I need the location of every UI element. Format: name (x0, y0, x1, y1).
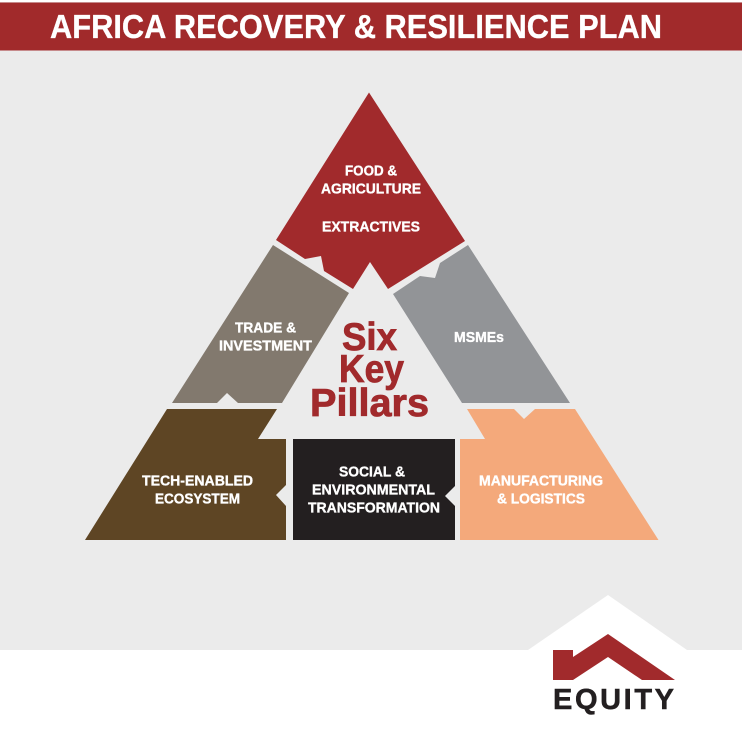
panel: social and environmental transformation: SOCIAL & (339, 464, 405, 480)
panel: food and agriculture, extractives: EXTRACTIVES (322, 220, 420, 236)
panel: trade and investment: TRADE & (235, 320, 296, 336)
panel: food and agriculture, extractives: FOOD & (345, 164, 397, 180)
panel: tech-enabled ecosystem: ECOSYSTEM (155, 492, 240, 508)
panel: tech-enabled ecosystem (85, 409, 286, 540)
pyramid diagram (85, 92, 658, 540)
logo: equity (528, 595, 687, 716)
icon: roof (553, 634, 675, 680)
logo: equity: EQUITY (553, 684, 674, 716)
panel: food and agriculture, extractives (276, 92, 465, 289)
panel: MSMEs: MSMEs (454, 330, 504, 346)
panel: manufacturing and logistics: MANUFACTURING (479, 474, 603, 490)
title banner (0, 2, 742, 50)
panel: tech-enabled ecosystem: TECH-ENABLED (142, 474, 253, 490)
panel: trade and investment (172, 245, 349, 403)
panel: MSMEs (393, 245, 570, 403)
panel: social and environmental transformation: ENVIRONMENTAL (312, 482, 435, 498)
panel: social and environmental transformation: TRANSFORMATION (308, 500, 440, 516)
center heading: six key pillars: Six (342, 316, 397, 359)
center heading: six key pillars: Key (339, 348, 404, 391)
center heading: six key pillars (310, 316, 429, 425)
panel: manufacturing and logistics (460, 409, 658, 540)
panel: social and environmental transformation (293, 439, 455, 540)
panel: trade and investment: INVESTMENT (219, 338, 312, 354)
center heading: six key pillars: Pillars (310, 382, 429, 425)
panel: manufacturing and logistics: & LOGISTICS (497, 492, 585, 508)
panel: food and agriculture, extractives: AGRICULTURE (321, 182, 421, 198)
title banner: AFRICA RECOVERY & RESILIENCE PLAN (50, 8, 662, 45)
